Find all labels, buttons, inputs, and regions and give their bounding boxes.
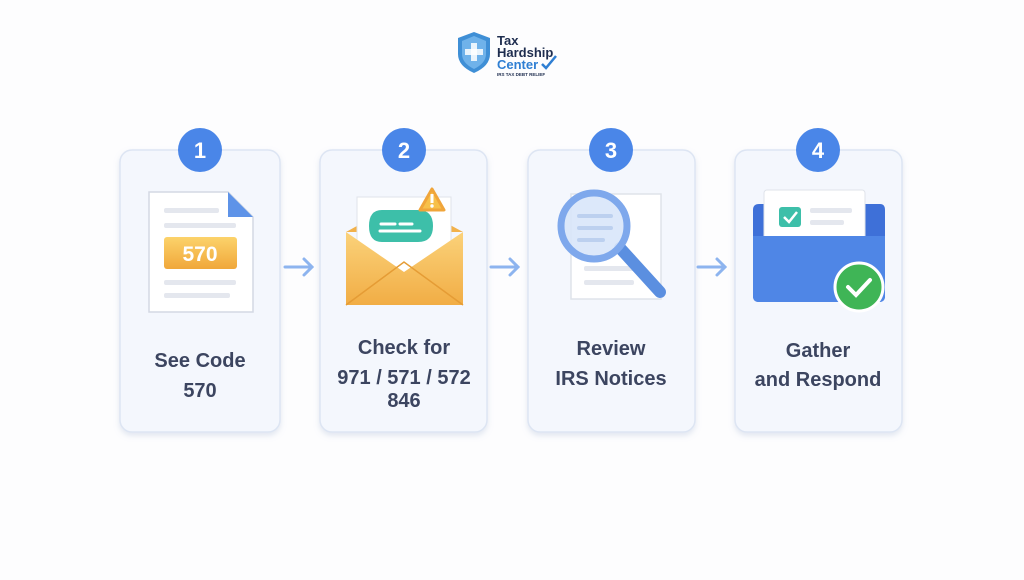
logo	[458, 32, 556, 77]
badge 4: 4	[812, 138, 825, 163]
icon: document with 570	[149, 192, 253, 312]
logo: Tax	[497, 33, 519, 48]
text: see code 570: See Code	[154, 350, 246, 372]
icon: document with 570: 570	[182, 243, 218, 266]
icon: folder with check	[753, 190, 885, 311]
arrow 1	[285, 259, 312, 275]
badge 2	[382, 128, 426, 172]
panel: step 4: and Respond	[755, 369, 881, 391]
text: gather and respond: Gather	[786, 340, 850, 362]
panel: step 3	[528, 150, 695, 432]
icon: envelope with warning	[346, 189, 463, 305]
badge 3	[589, 128, 633, 172]
logo: Hardship	[497, 45, 553, 60]
arrow 2	[491, 259, 518, 275]
logo: Center	[497, 57, 538, 72]
panel: step 2: 846	[387, 390, 421, 412]
panel: step 2	[320, 150, 487, 432]
text: check for codes: Check for	[358, 337, 450, 359]
arrow 3	[698, 259, 725, 275]
badge 1	[178, 128, 222, 172]
badge 4	[796, 128, 840, 172]
badge 3: 3	[605, 138, 617, 163]
panel: step 3: IRS Notices	[555, 368, 667, 390]
text: review irs notices: Review	[577, 338, 646, 360]
icon: magnifier over document	[561, 193, 661, 299]
panel: step 4	[735, 150, 902, 432]
panel: step 1: 570	[183, 380, 217, 402]
badge 2: 2	[398, 138, 410, 163]
badge 1: 1	[194, 138, 206, 163]
panel: step 1	[120, 150, 280, 432]
panel: step 2: 971 / 571 / 572	[337, 367, 471, 389]
logo: IRS TAX DEBT RELIEF	[497, 72, 545, 77]
